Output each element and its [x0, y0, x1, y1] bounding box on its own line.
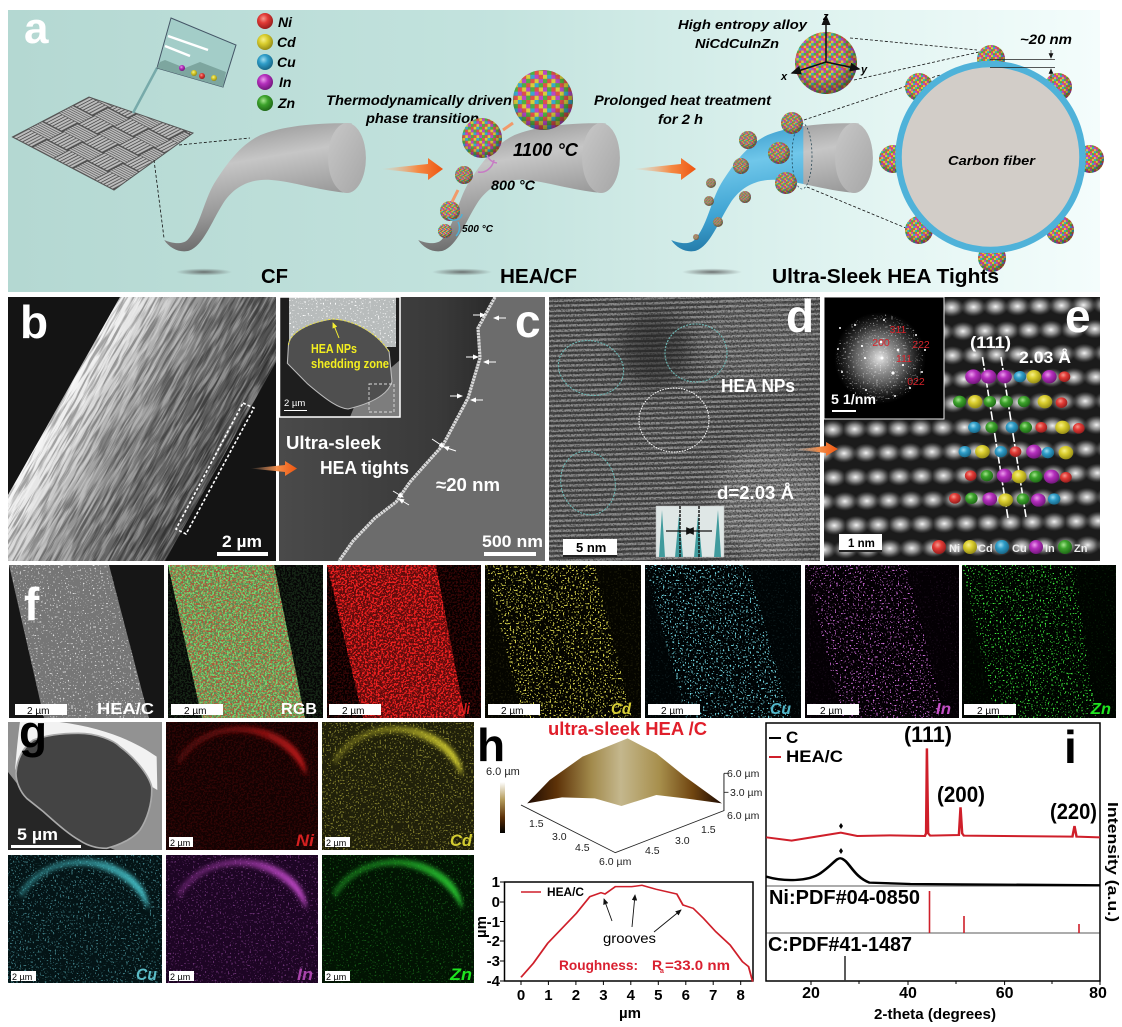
- scale bar 5 nm: 5 nm: [576, 540, 606, 555]
- roughness line chart: -4: [487, 973, 501, 990]
- inset FFT: 222: [912, 339, 930, 351]
- f2 RGB map: RGB: [281, 701, 317, 718]
- roughness line chart: µm: [473, 916, 490, 938]
- roughness line chart: -2: [487, 933, 500, 950]
- reference C PDF: C:PDF#41-1487: [768, 934, 912, 956]
- label HEA/CF: HEA/CF: [500, 266, 577, 288]
- reference Ni PDF: [769, 887, 1079, 933]
- f6 In map: In: [936, 701, 951, 718]
- text labels c: HEA tights: [320, 458, 409, 478]
- g Cu map: [8, 855, 162, 984]
- inset FFT: 311: [890, 324, 907, 336]
- panel i: XRD chart: [766, 721, 1121, 1023]
- process text 2: [594, 92, 772, 127]
- AFM 3D surface: 6.0 µm: [727, 810, 760, 822]
- f6 In map: [805, 565, 959, 718]
- fiber HEA/CF: [418, 123, 620, 251]
- lattice labels: 2.03 Å: [1019, 348, 1071, 367]
- AFM 3D surface: 6.0 µm: [599, 856, 632, 868]
- inset: cross-section: [279, 297, 400, 417]
- panel letter a: a: [24, 4, 49, 53]
- inset: cross-section: shedding zone: [311, 357, 389, 371]
- roughness line chart: -3: [487, 953, 500, 970]
- roughness line chart: a: [660, 968, 664, 975]
- icon: pouring beaker: [133, 18, 236, 113]
- process text 2: Prolonged heat treatment: [594, 92, 772, 108]
- peak labels: (111): [904, 722, 952, 747]
- peak labels: (200): [937, 782, 985, 807]
- x axis labels: 60: [996, 985, 1014, 1002]
- labels d: HEA NPs: [721, 376, 795, 396]
- f1 SEM: HEA/C: [97, 701, 155, 718]
- dashed zoom lines: [154, 38, 979, 238]
- g Ni map: 2 µm: [170, 838, 190, 848]
- roughness line chart: 4: [627, 987, 636, 1004]
- process text 1: phase transition: [365, 110, 479, 126]
- f2 RGB map: [168, 565, 323, 718]
- AFM 3D surface: 3.0: [552, 831, 567, 843]
- label CF: CF: [261, 266, 288, 288]
- roughness line chart: 8: [737, 987, 745, 1004]
- element atom overlay: [949, 369, 1085, 507]
- AFM 3D surface: 3.0 µm: [730, 787, 763, 799]
- high entropy alloy sphere with axes: z: [822, 11, 829, 23]
- heading h: ultra-sleek HEA /C: [548, 719, 707, 739]
- element legend: Cu: [1012, 543, 1027, 555]
- AFM 3D surface: [521, 738, 763, 868]
- arrow d to e: [795, 442, 838, 456]
- width arrows: [393, 315, 506, 505]
- element legend: Cd: [978, 543, 993, 555]
- g Zn map: Zn: [449, 965, 472, 984]
- panel letter d: d: [786, 290, 814, 342]
- f2 RGB map: 2 µm: [184, 706, 206, 717]
- inset FFT: 111: [896, 353, 912, 365]
- roughness line chart: 0: [517, 987, 525, 1004]
- inset: cross-section: 2 µm: [284, 398, 305, 409]
- label CF: [176, 266, 288, 288]
- roughness line chart: [473, 874, 753, 1022]
- element legend: Ni: [949, 543, 960, 555]
- roughness line chart: HEA/C: [547, 885, 584, 899]
- element legend: In: [1045, 543, 1055, 555]
- icon: woven carbon cloth: [12, 97, 193, 190]
- inset: cross-section: HEA NPs: [311, 342, 357, 356]
- thickness annotation 20 nm: ~20 nm: [1020, 32, 1072, 47]
- cross-section: carbon fiber with HEA tights: [879, 45, 1104, 272]
- f5 Cu map: Cu: [770, 701, 791, 718]
- inset FFT: 5 1/nm: [831, 391, 876, 407]
- f3 Ni map: 2 µm: [342, 706, 364, 717]
- temperature labels: 500 °C: [462, 224, 494, 235]
- element legend: Zn: [1074, 543, 1088, 555]
- g In map: 2 µm: [170, 972, 190, 982]
- panel b: SEM of fiber: [8, 297, 276, 561]
- g1 SEM cross-section: g: [19, 706, 47, 758]
- legend: [769, 728, 843, 766]
- process text 1: [326, 92, 512, 126]
- dark fiber body: [279, 297, 495, 561]
- g Ni map: [166, 722, 318, 850]
- process text 2: for 2 h: [658, 111, 703, 127]
- legend: C: [786, 728, 798, 747]
- roughness line chart: 1: [544, 987, 553, 1004]
- x axis labels: [802, 985, 1107, 1002]
- f3 Ni map: Ni: [458, 701, 470, 718]
- roughness line chart: 6: [682, 987, 690, 1004]
- temperature labels: 1100 °C: [513, 140, 579, 160]
- roughness line chart: 3: [599, 987, 608, 1004]
- panel letter e: e: [1065, 290, 1091, 342]
- carbon fiber CF: [164, 123, 366, 251]
- inset FFT: 200: [872, 337, 890, 349]
- f1 SEM: f: [24, 578, 40, 630]
- f5 Cu map: [645, 565, 801, 718]
- tights bright edge line: [339, 297, 495, 561]
- legend: element balls: [257, 13, 296, 111]
- panel e: atomic resolution image: [824, 290, 1100, 561]
- red XRD curve: [766, 748, 1100, 841]
- fiber: ultra-sleek coated: [671, 112, 873, 251]
- selected nanoparticle outline: [639, 388, 709, 452]
- panel letter i: i: [1064, 721, 1077, 773]
- roughness line chart: Roughness:: [559, 957, 638, 973]
- roughness line chart: 7: [709, 987, 717, 1004]
- panel g: cross-section EDS maps: [8, 706, 474, 984]
- nanoparticles growing: [438, 70, 573, 238]
- g Cu map: Cu: [136, 965, 158, 984]
- scale bar 500 nm: [482, 536, 542, 556]
- AFM 3D surface: 1.5: [701, 824, 716, 836]
- temperature labels: 800 °C: [491, 177, 536, 193]
- roughness line chart: 1: [492, 874, 500, 891]
- temperature labels: [462, 140, 579, 235]
- g Cd map: [322, 722, 474, 850]
- inset line profile: [656, 506, 724, 557]
- peak labels: (220): [1050, 799, 1097, 824]
- label HEA/CF: [432, 266, 577, 288]
- f7 Zn map: [962, 565, 1116, 718]
- thickness annotation 20 nm: [990, 32, 1072, 78]
- y axis title: Intensity (a.u.): [1104, 802, 1121, 922]
- peak labels: [904, 722, 1097, 824]
- legend: element balls: Cu: [277, 54, 296, 70]
- high entropy alloy label: NiCdCuInZn: [695, 36, 779, 51]
- high entropy alloy label: [678, 17, 808, 51]
- g Cu map: 2 µm: [12, 972, 32, 982]
- black XRD curve: [766, 858, 1100, 885]
- f1 SEM: [9, 565, 164, 718]
- g1 SEM cross-section: 5 µm: [17, 825, 58, 844]
- panel d: HRTEM: [549, 290, 825, 561]
- g In map: In: [297, 965, 313, 984]
- g Cd map: Cd: [450, 831, 473, 850]
- reference Ni PDF: Ni:PDF#04-0850: [769, 887, 920, 909]
- f4 Cd map: [485, 565, 641, 718]
- AFM 3D surface: 6.0 µm: [727, 768, 760, 780]
- carbon peak markers: [839, 823, 843, 854]
- HEA nanoparticle outlines: [552, 324, 727, 521]
- labels d: [717, 376, 795, 503]
- roughness line chart: µm: [619, 1005, 641, 1022]
- dotted selection box: [176, 403, 254, 534]
- high entropy alloy sphere with axes: y: [860, 64, 868, 76]
- lattice labels: (111): [970, 333, 1011, 352]
- element legend: [932, 540, 1088, 555]
- scale bar 500 nm: 500 nm: [482, 532, 543, 551]
- arrow 1: [380, 158, 443, 180]
- panel f: EDS maps row: [9, 565, 1116, 718]
- f1 SEM: 2 µm: [27, 706, 49, 717]
- f4 Cd map: 2 µm: [501, 706, 523, 717]
- f7 Zn map: 2 µm: [977, 706, 999, 717]
- panel letter c: c: [515, 295, 541, 347]
- f7 Zn map: Zn: [1090, 701, 1111, 718]
- g Cd map: 2 µm: [326, 838, 346, 848]
- legend: element balls: Cd: [277, 34, 296, 50]
- g In map: [166, 855, 318, 984]
- f6 In map: 2 µm: [820, 706, 842, 717]
- cross-section: carbon fiber with HEA tights: Carbon fiber: [948, 153, 1036, 168]
- roughness line chart: R: [652, 957, 662, 973]
- legend: element balls: Zn: [277, 95, 295, 111]
- inset FFT: 022: [907, 376, 925, 388]
- roughness line chart: 0: [492, 894, 500, 911]
- AFM 3D surface: 1.5: [529, 818, 544, 830]
- legend: element balls: In: [279, 74, 291, 90]
- f5 Cu map: 2 µm: [661, 706, 683, 717]
- AFM colour bar: 6.0 µm: [486, 766, 520, 778]
- process text 1: Thermodynamically driven: [326, 92, 512, 108]
- g1 SEM cross-section: [8, 722, 162, 850]
- roughness line chart: -1: [487, 914, 500, 931]
- g Zn map: [322, 855, 474, 984]
- labels d: d=2.03 Å: [717, 483, 794, 503]
- scale bar 2 um: 2 µm: [222, 532, 262, 551]
- x axis labels: 80: [1089, 985, 1107, 1002]
- label Ultra-Sleek HEA Tights: [682, 266, 999, 288]
- f4 Cd map: Cd: [611, 701, 632, 718]
- panel h: AFM and roughness: [473, 719, 763, 1022]
- AFM colour bar: [486, 766, 520, 833]
- roughness line chart: 5: [654, 987, 662, 1004]
- scale bar 2 um: [217, 536, 268, 556]
- x axis labels: 20: [802, 985, 820, 1002]
- high entropy alloy label: High entropy alloy: [678, 17, 808, 32]
- g Zn map: 2 µm: [326, 972, 346, 982]
- text labels c: Ultra-sleek: [286, 433, 382, 453]
- scale bar 1 nm: 1 nm: [848, 538, 875, 550]
- high entropy alloy sphere with axes: x: [780, 71, 788, 83]
- legend: element balls: Ni: [278, 14, 293, 30]
- panel letter b: b: [20, 296, 48, 348]
- AFM 3D surface: 4.5: [645, 845, 660, 857]
- high entropy alloy sphere with axes: [780, 11, 868, 94]
- x axis title: 2-theta (degrees): [874, 1006, 996, 1023]
- x axis labels: 40: [899, 985, 917, 1002]
- panel letter h: h: [477, 719, 505, 771]
- roughness line chart: 2: [572, 987, 580, 1004]
- AFM 3D surface: 3.0: [675, 835, 690, 847]
- arrow b to c: [250, 461, 297, 476]
- inset FFT: [824, 297, 944, 419]
- text labels c: ≈20 nm: [436, 475, 500, 495]
- roughness line chart: grooves: [603, 930, 656, 946]
- text labels c: [287, 436, 499, 491]
- g Ni map: Ni: [296, 831, 315, 850]
- roughness line chart: =33.0 nm: [665, 957, 730, 973]
- AFM 3D surface: 4.5: [575, 842, 590, 854]
- arrow 2: [633, 158, 696, 180]
- panel c: ultra-sleek tights SEM: [279, 295, 545, 561]
- panel a: synthesis schematic: [8, 4, 1104, 292]
- lattice labels: [970, 336, 1070, 363]
- legend: HEA/C: [786, 747, 843, 766]
- scale bar 5 nm: [563, 539, 617, 557]
- f3 Ni map: [327, 565, 481, 718]
- label Ultra-Sleek HEA Tights: Ultra-Sleek HEA Tights: [772, 266, 999, 288]
- lattice plane lines: [982, 357, 1026, 518]
- scale bar 1 nm: [839, 534, 882, 552]
